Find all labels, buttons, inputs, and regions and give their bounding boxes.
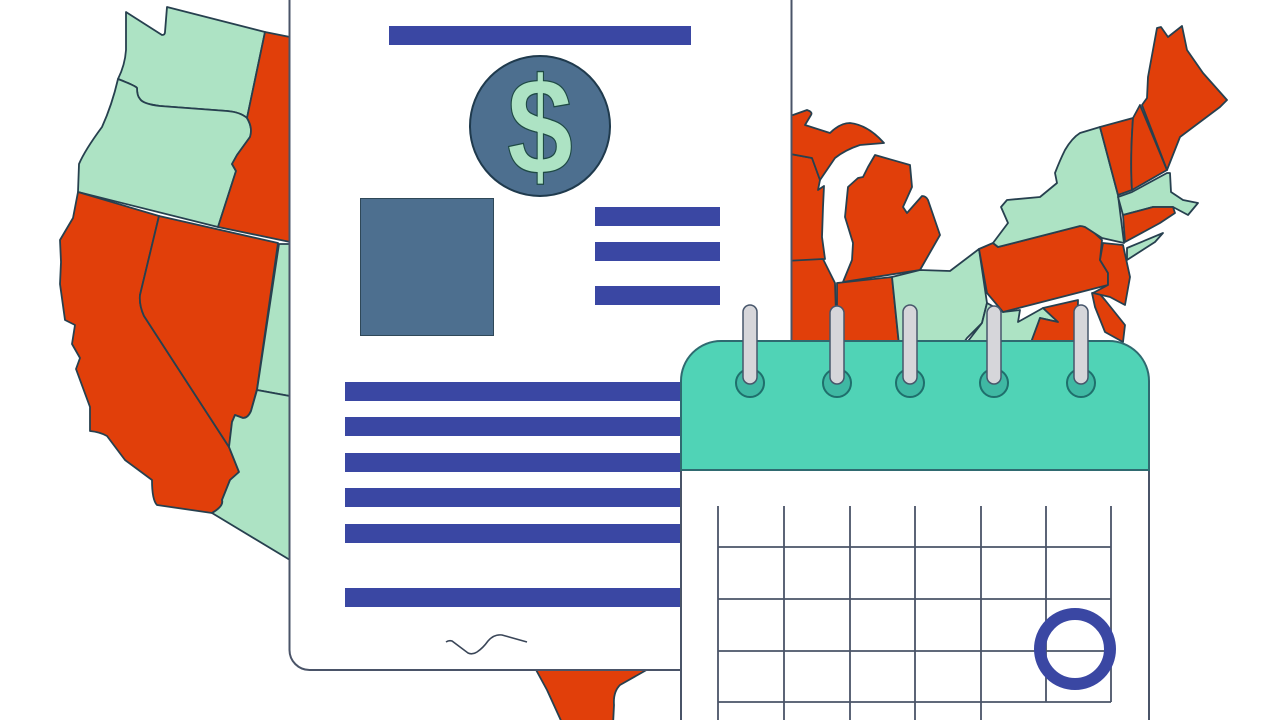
map: Great Lakes states (785, 110, 987, 345)
map: western states (60, 7, 295, 563)
calendar page (681, 470, 1149, 720)
state: New Hampshire (1131, 105, 1167, 190)
state: Illinois (785, 259, 837, 345)
circled date (1040, 614, 1110, 684)
state: Oregon (78, 79, 251, 227)
state: New York (993, 127, 1124, 247)
state: Massachusetts (1118, 173, 1198, 215)
state: Utah (257, 244, 295, 397)
short text lines (595, 207, 720, 305)
map: Texas tip (535, 668, 650, 720)
state: New Jersey (1093, 243, 1130, 305)
state: Idaho (218, 32, 295, 243)
icon: dollar coin: $ (507, 50, 573, 204)
state: Pennsylvania (979, 226, 1108, 312)
binding pins (743, 305, 1088, 384)
state: Wisconsin (785, 153, 825, 262)
document title bar (389, 26, 691, 45)
map: Mid-Atlantic states (965, 226, 1130, 345)
document panel (290, 0, 792, 670)
state: Delaware shore (1092, 292, 1125, 342)
state: Washington (118, 7, 265, 118)
binding rings (736, 369, 1095, 397)
state: Maine (1142, 26, 1227, 170)
state: Vermont (1100, 118, 1133, 195)
document sheet (290, 0, 792, 670)
icon: dollar coin (470, 50, 610, 204)
state: Arizona (212, 390, 295, 563)
state: California (60, 192, 239, 513)
state: Long Island (1127, 233, 1163, 260)
long text lines (345, 382, 681, 607)
state: Maryland (1030, 300, 1078, 345)
signature (446, 635, 527, 654)
map: New England states (993, 26, 1227, 260)
calendar header (681, 341, 1149, 470)
image placeholder (360, 198, 494, 336)
state: Indiana (837, 277, 899, 345)
state: Michigan lower peninsula (843, 155, 940, 282)
state: Ohio (892, 249, 987, 345)
calendar (681, 305, 1149, 720)
state: Virginia (965, 303, 1058, 345)
calendar grid (718, 506, 1111, 720)
state: Michigan upper peninsula (785, 110, 884, 180)
state: Connecticut and Rhode Island (1123, 207, 1175, 242)
state: Nevada (140, 216, 278, 447)
